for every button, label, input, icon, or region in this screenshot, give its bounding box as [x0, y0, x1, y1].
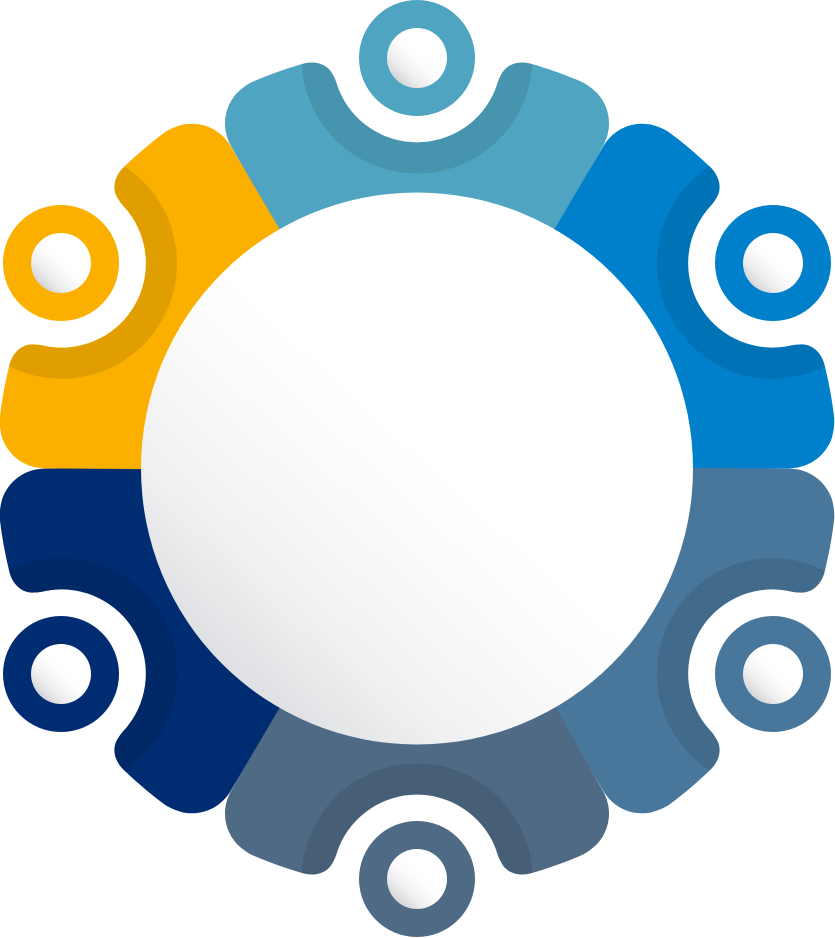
- icon: lower right steel blue head: [715, 616, 831, 732]
- icon: lower left navy head: [3, 616, 119, 732]
- icon: upper right blue head: [715, 205, 831, 321]
- central white circle: [141, 192, 693, 744]
- figure: lower left navy body: [0, 468, 280, 814]
- figure: bottom slate body: [225, 707, 609, 874]
- figure: upper right blue body: [554, 124, 834, 468]
- icon: top teal head: [359, 0, 475, 116]
- figure: upper left yellow body: [0, 124, 280, 470]
- figure: lower right steel blue body: [556, 468, 834, 814]
- icon: upper left yellow head: [3, 205, 119, 321]
- icon: bottom slate head: [359, 821, 475, 937]
- figure: top teal body: [225, 62, 609, 230]
